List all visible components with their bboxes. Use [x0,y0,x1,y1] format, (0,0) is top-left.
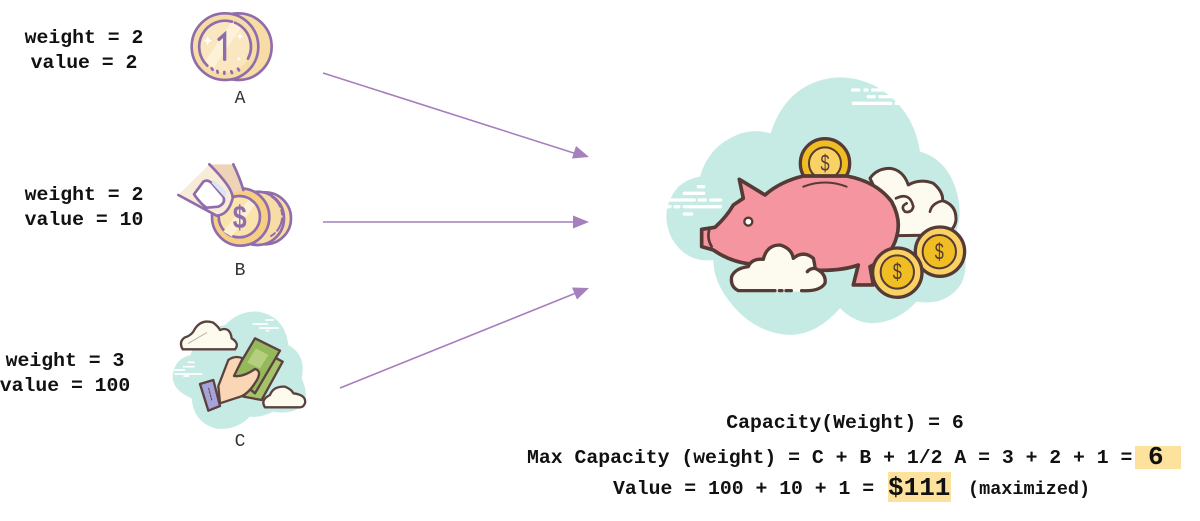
text: max capacity equation [527,442,1181,472]
curly tail [896,196,913,212]
text: value equation [613,472,1090,503]
label: item B weight and value: weight = 2 [25,184,143,206]
text: value equation: $111 [888,473,950,503]
text: max capacity equation: Max Capacity (weight) = C + B + 1/2 A = 3 + 2 + 1 = [527,447,1132,469]
label: item C weight and value [0,350,130,397]
icon: piggy bank with coins and clouds: $ [893,260,902,285]
front cloud [731,245,825,292]
wind streaks [667,90,903,214]
highlight: $111 [888,472,951,502]
back cloud [870,168,956,236]
icon: piggy bank with coins and clouds: $ [820,151,830,177]
label: item C weight and value: weight = 3 [6,350,124,372]
text: value equation: (maximized) [968,479,1090,500]
label: B: B [235,261,246,281]
icon: piggy bank with coins and clouds: $ [935,240,944,265]
icon: hand holding coins B [178,164,291,246]
icon: hand holding cash C [173,311,306,429]
icon: coin A [192,13,272,80]
text: max capacity equation: 6 [1148,442,1164,472]
label: item B weight and value: value = 10 [25,209,143,231]
label: C: C [235,432,246,452]
label: item A weight and value [25,27,143,74]
label: item A weight and value: value = 2 [31,52,137,74]
arrow: B to piggy bank [323,216,589,228]
text: value equation: Value = 100 + 10 + 1 = [613,478,874,500]
label: item C weight and value: value = 100 [0,375,130,397]
arrow: C to piggy bank [340,288,589,388]
front coins [915,227,965,276]
slot [803,182,847,187]
coin in slot [800,139,850,188]
pig body [702,176,898,285]
label: item B weight and value [25,184,143,231]
highlight: 6 [1135,446,1181,469]
arrow: A to piggy bank [323,73,589,158]
teal cloud backdrop [666,77,966,335]
text: capacity: Capacity(Weight) = 6 [726,412,964,434]
label: item A weight and value: weight = 2 [25,27,143,49]
icon: hand holding coins B: $ [233,200,247,236]
label: A: A [235,89,246,109]
icon: piggy bank with coins and clouds [666,77,966,335]
